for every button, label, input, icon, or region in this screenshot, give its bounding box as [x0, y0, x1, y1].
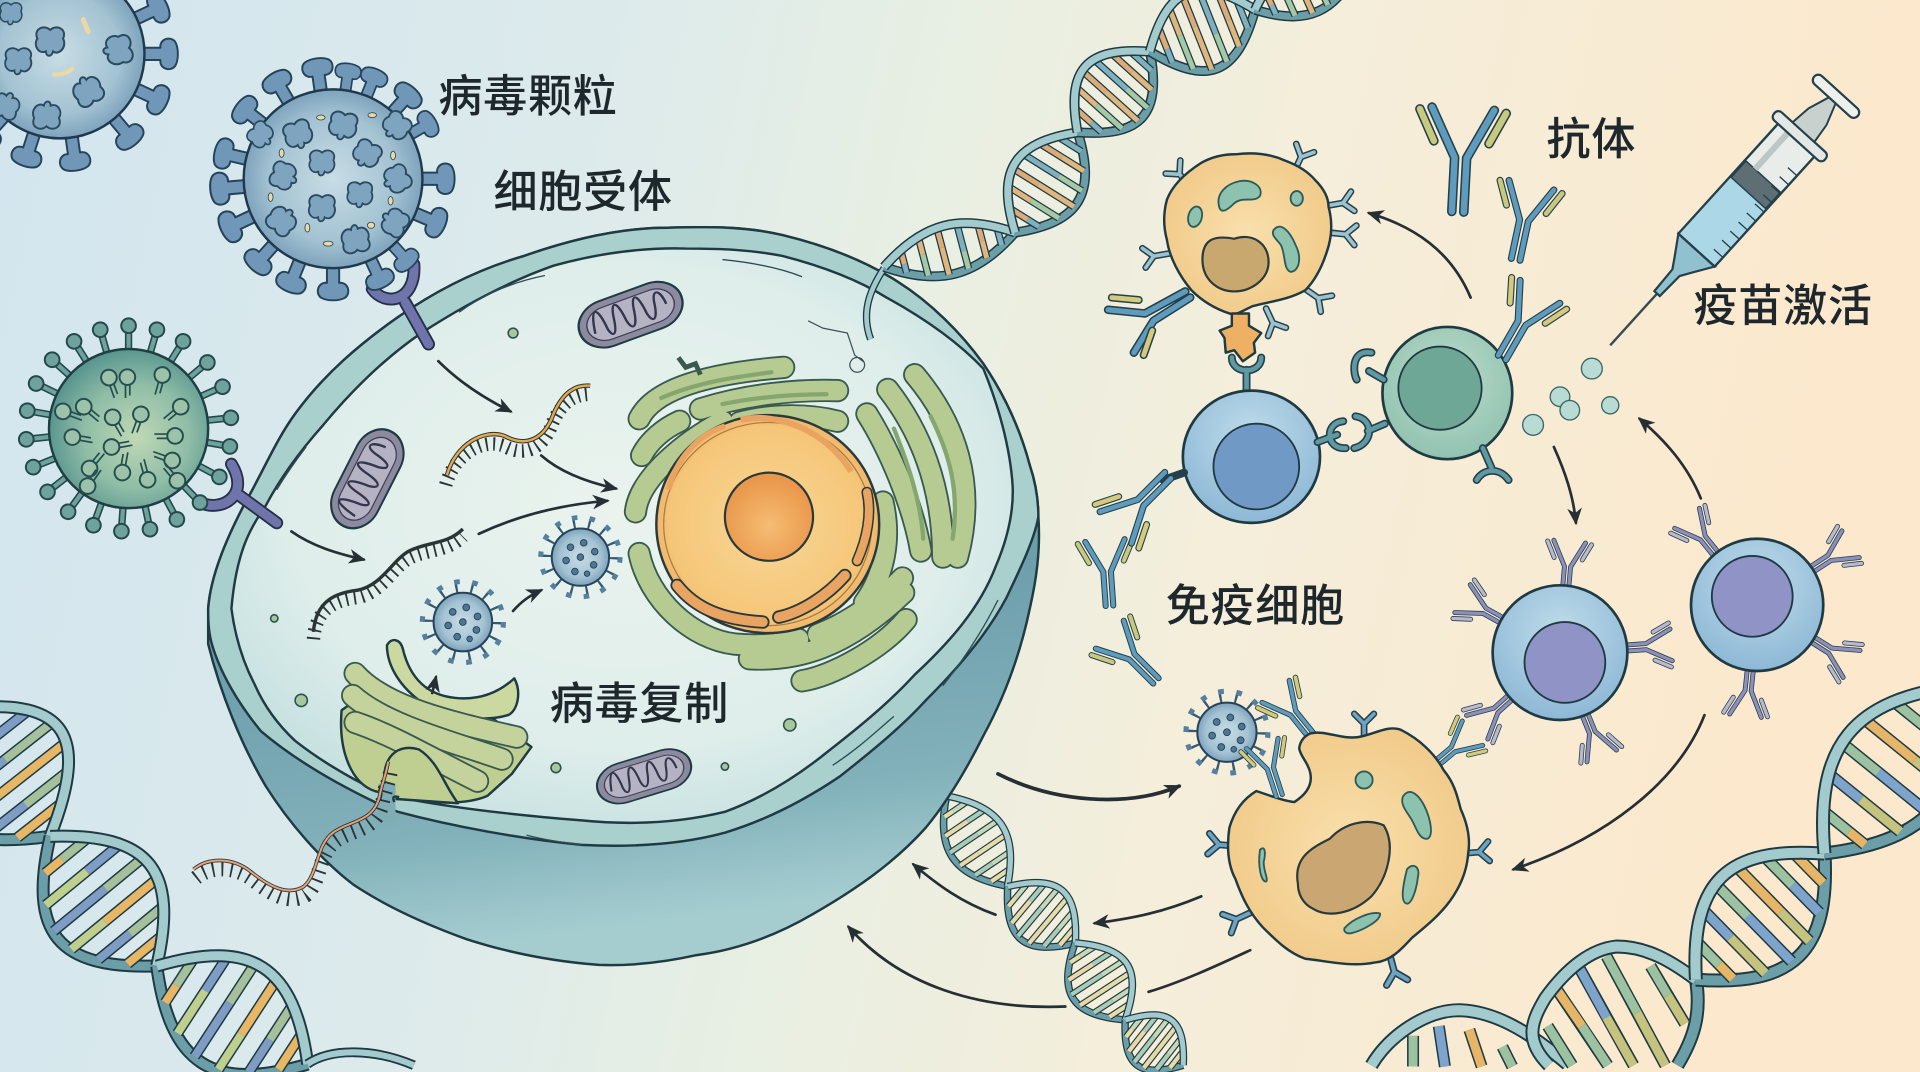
arrow: vaccine to blue cell: [1554, 447, 1576, 523]
label: cell receptor: 细胞受体: [493, 168, 673, 217]
label: antibody: 抗体: [1547, 115, 1636, 164]
arrow: cell to virus near macrophage: [998, 774, 1179, 799]
arrow: violet cell to macrophage: [1513, 715, 1704, 869]
nucleus: [656, 415, 879, 633]
dna helix: top entering cell: [866, 0, 1370, 339]
arrow: stroke towards dna: [1149, 950, 1250, 992]
arrow: long return to cell: [849, 927, 1065, 1007]
virus: particle: [209, 56, 455, 300]
floating antibodies: [1078, 106, 1562, 700]
label: immune cells: 免疫细胞: [1166, 582, 1345, 631]
dna helix: bottom right: [1371, 650, 1920, 1067]
cell bowl: [208, 227, 1039, 965]
arrow: violet cell to vaccine: [1640, 419, 1701, 498]
membrane gap: [375, 784, 399, 823]
helix lower-left section: [1371, 1010, 1567, 1067]
golgi apparatus: [341, 640, 531, 803]
mitochondria: [322, 274, 696, 810]
label: viral replication: 病毒复制: [550, 680, 729, 729]
receptor: upper: [372, 264, 429, 344]
receptor: lower: [200, 464, 277, 523]
cytoplasm granules: [271, 328, 796, 773]
macrophage: [1208, 676, 1490, 985]
cytoplasm: [231, 248, 1013, 823]
arrow: green cell to orange cell: [1369, 213, 1471, 298]
arrow: dna side return: [913, 864, 996, 915]
arrows in cell: [291, 361, 616, 693]
stray filament in cell: [808, 321, 865, 372]
host cell: [200, 227, 1039, 965]
viral rna in cytoplasm: orange: [446, 386, 591, 485]
antibodies: attached to orange cell: [1108, 291, 1190, 355]
antibody: into macrophage bite: [1241, 736, 1301, 803]
helix lower-middle section: [1532, 947, 1698, 1065]
viral rna in cytoplasm: dark: [313, 529, 463, 639]
virus: green: [18, 318, 239, 539]
viral rna crossing membrane: [193, 762, 391, 899]
syringe: [1585, 69, 1865, 368]
virus near macrophage: [1186, 691, 1268, 773]
label: virus particle: 病毒颗粒: [438, 72, 618, 121]
green endoplasmic reticulum: [636, 358, 965, 681]
synapse link and green cell receptors: [1318, 352, 1509, 480]
arrow: from lower immune cell to cell a: [1095, 896, 1201, 923]
virus in cell: mature: [541, 517, 620, 597]
vaccine particles: [1523, 358, 1619, 435]
label: vaccine activation: 疫苗激活: [1693, 282, 1873, 331]
immune cell: orange upper: [1142, 144, 1356, 336]
immune cell: violet left: [1452, 540, 1673, 764]
nucleolus: [725, 473, 813, 561]
cell rim: [208, 227, 1038, 846]
dna helix: bottom center: [922, 779, 1201, 1072]
immune cell: violet right: [1670, 504, 1863, 718]
immune cell: blue: [1183, 358, 1320, 523]
antigen fragment: [1220, 313, 1261, 361]
virus in cell: assembling: [422, 581, 503, 663]
dna helix: bottom left: [0, 665, 414, 1072]
rim highlights: [277, 260, 998, 845]
immune cell: green: [1382, 327, 1512, 459]
virus: top-left partial: [0, 0, 178, 173]
antibody: on green cell: [1475, 276, 1568, 373]
antibody: on blue cell: [1094, 454, 1190, 549]
